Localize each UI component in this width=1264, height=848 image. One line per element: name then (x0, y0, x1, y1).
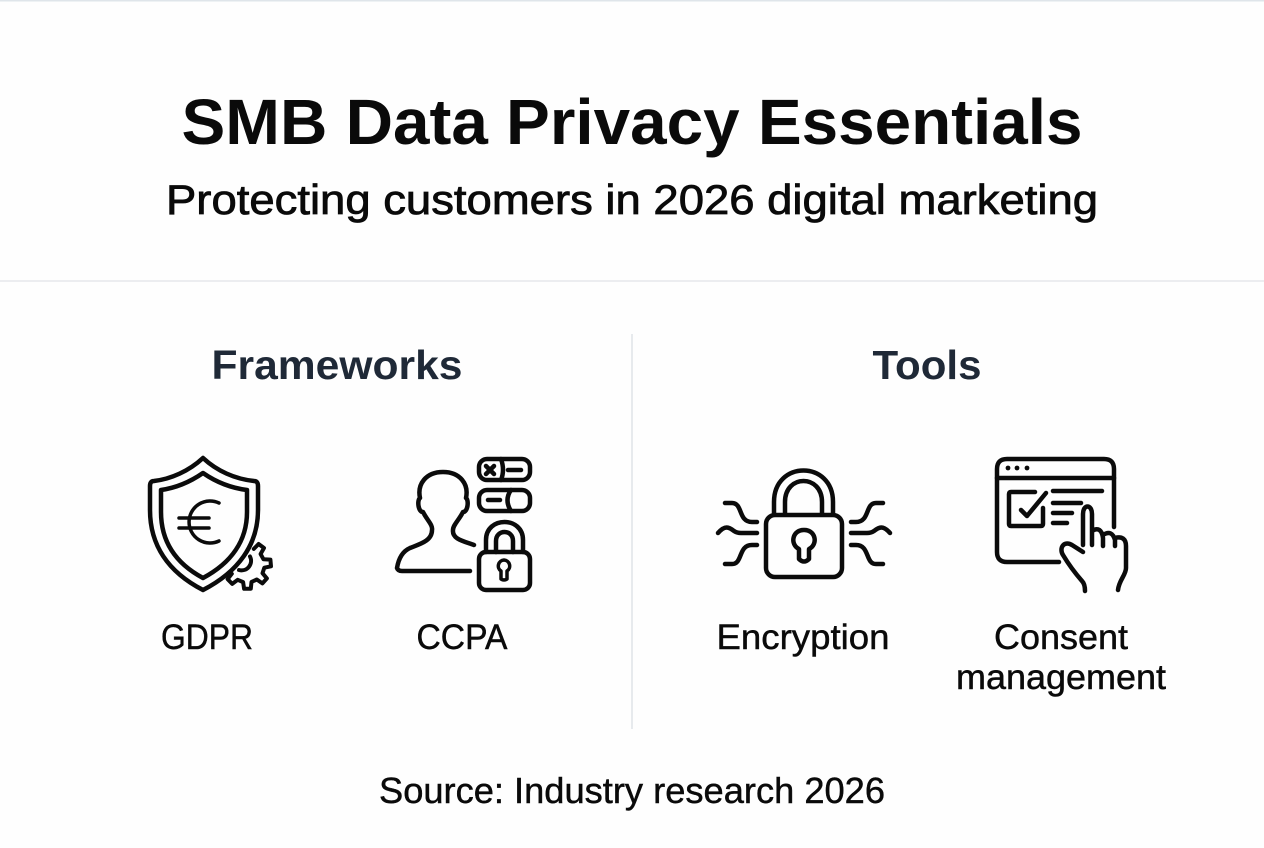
subtitle: Protecting customers in 2026 digital marketing (166, 176, 1098, 223)
label: Consent management: management (956, 658, 1166, 697)
label: CCPA: CCPA (416, 618, 508, 657)
icon: consent management window with hand (997, 459, 1126, 591)
title: SMB Data Privacy Essentials (182, 86, 1082, 158)
source note: Source: Industry research 2026 (379, 770, 885, 811)
heading: tools: Tools (872, 342, 982, 388)
heading: frameworks: Frameworks (212, 342, 462, 388)
label: Consent management (956, 618, 1166, 697)
icon: encryption padlock with data lines (718, 470, 890, 577)
label: Consent management: Consent (994, 618, 1128, 657)
icon: CCPA person with toggles and lock (397, 459, 530, 590)
label: GDPR: GDPR (161, 618, 253, 657)
label: Encryption: Encryption (716, 618, 890, 657)
icon: window dots (1006, 466, 1029, 470)
icon: GDPR shield with euro and gear (150, 458, 271, 590)
